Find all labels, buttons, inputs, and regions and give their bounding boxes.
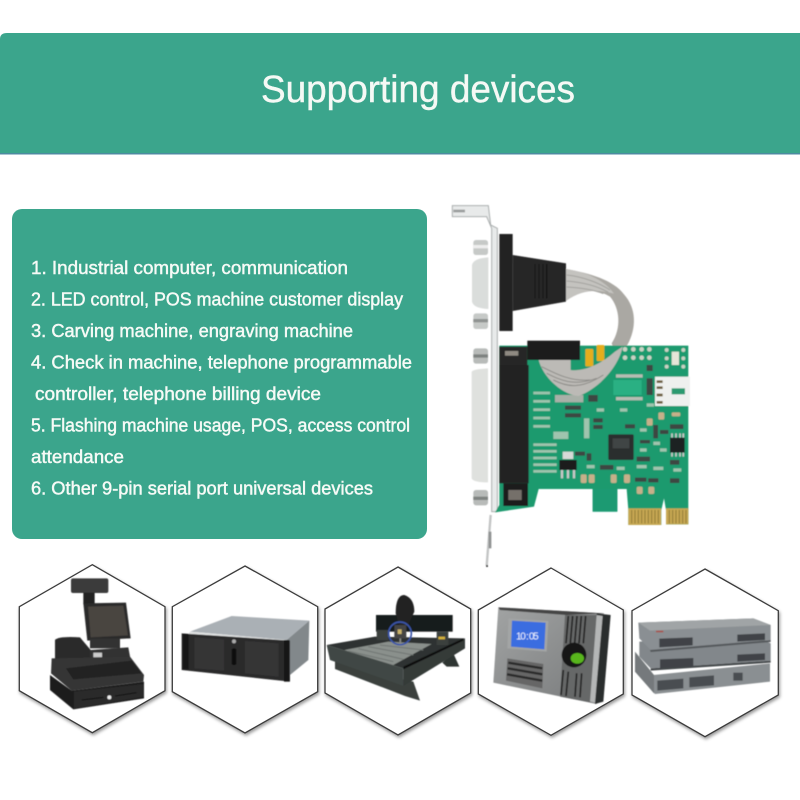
ribbon cable rear: [566, 269, 634, 356]
list text: 6. Other 9-pin serial port universal devices: [31, 478, 373, 498]
hexagon frame: [632, 569, 778, 737]
icon: time clock: [493, 607, 611, 704]
header banner: [0, 33, 800, 154]
hexagon frame: [19, 565, 165, 733]
icon: switch stack: [635, 618, 771, 694]
icon: rack chassis: [182, 616, 309, 682]
D-sub connectors: [472, 240, 488, 505]
icon: cash register: [50, 578, 144, 709]
list text: [31, 258, 412, 498]
panel: supported device list: [12, 209, 427, 539]
PCB: [495, 345, 690, 525]
list text: 3. Carving machine, engraving machine: [31, 321, 353, 341]
device 1: POS terminal: [19, 565, 165, 733]
list text: 4. Check in machine, telephone programmable: [31, 352, 412, 372]
serial connector housing: [499, 234, 614, 331]
list text: 5. Flashing machine usage, POS, access control: [31, 416, 410, 436]
PCB components: [533, 345, 690, 494]
device 4: fingerprint attendance terminal: [478, 568, 623, 735]
icon: time clock: 10 : 05: [516, 631, 539, 642]
hexagon frame: [325, 567, 471, 735]
device 2: industrial server: [172, 566, 318, 733]
device 3: CNC carving machine: [325, 567, 471, 735]
hexagon frame: [172, 566, 318, 733]
ribbon cable front: [539, 347, 623, 396]
device 5: stacked telephone switches: [632, 569, 778, 737]
list text: 2. LED control, POS machine customer display: [31, 290, 403, 310]
product photo: PCIe serial and parallel card: [452, 206, 690, 567]
list text: attendance: [31, 447, 124, 467]
list text: 1. Industrial computer, communication: [31, 258, 348, 278]
connector housing on card: [499, 341, 580, 506]
mounting bracket: [452, 206, 497, 567]
icon: engraver: [327, 595, 465, 701]
title: Supporting devices: [261, 69, 575, 111]
list text: controller, telephone billing device: [35, 384, 321, 404]
hexagon frame: [478, 568, 623, 735]
